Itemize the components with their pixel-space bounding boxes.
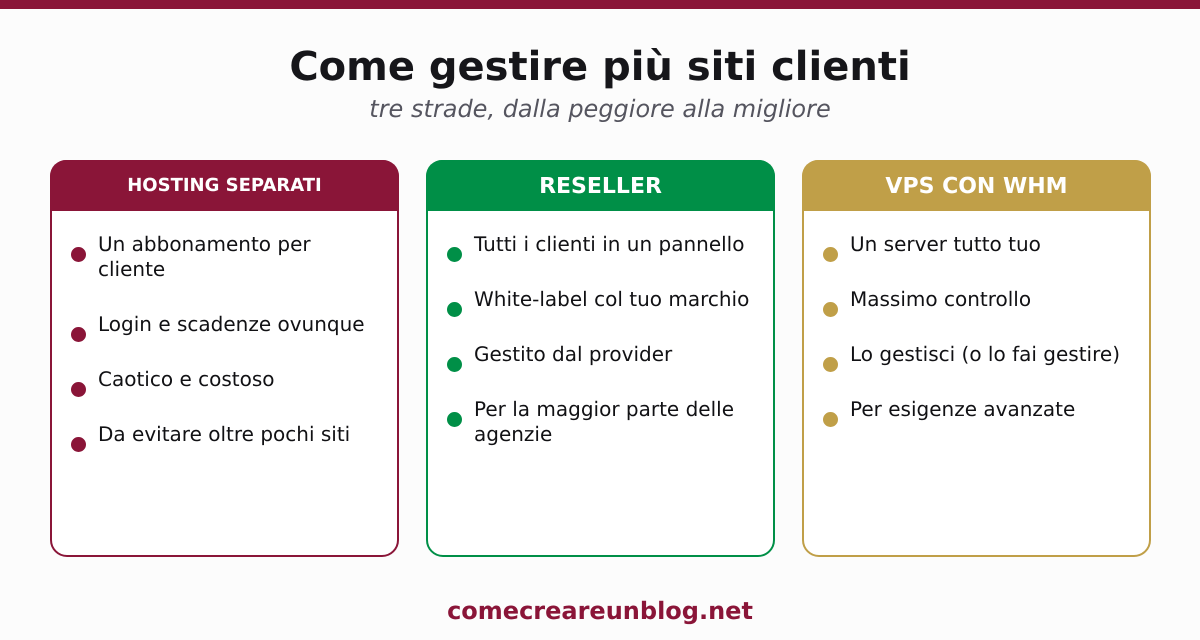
panel header: vps con whm bbox=[802, 160, 1151, 211]
panel header: hosting separati: HOSTING SEPARATI bbox=[127, 175, 322, 196]
panel: reseller bbox=[426, 160, 775, 556]
list item: esigenze: Per esigenze avanzate bbox=[850, 397, 1075, 421]
list item: abbonamento: cliente bbox=[98, 257, 165, 281]
list item: agenzie bbox=[447, 397, 734, 446]
panel: hosting separati bbox=[50, 160, 399, 556]
list item: controllo bbox=[823, 287, 1031, 317]
list item: agenzie: agenzie bbox=[474, 422, 552, 446]
list item: controllo: Massimo controllo bbox=[850, 287, 1031, 311]
list item: caotico: Caotico e costoso bbox=[98, 367, 274, 391]
list item: gestito: Gestito dal provider bbox=[474, 342, 673, 366]
list item: server: Un server tutto tuo bbox=[850, 232, 1041, 256]
panel header: reseller: RESELLER bbox=[539, 174, 662, 199]
panel header: hosting separati bbox=[50, 160, 399, 211]
list item: agenzie: Per la maggior parte delle bbox=[474, 397, 734, 421]
panel header: vps con whm: VPS CON WHM bbox=[885, 174, 1068, 199]
top accent bar bbox=[0, 0, 1200, 9]
subtitle: tre strade, dalla peggiore alla migliore bbox=[369, 95, 831, 123]
list item: white-label: White-label col tuo marchio bbox=[474, 287, 749, 311]
panel: vps con whm bbox=[802, 160, 1151, 556]
list item: gestisci: Lo gestisci (o lo fai gestire) bbox=[850, 342, 1120, 366]
title: Come gestire più siti clienti bbox=[289, 44, 911, 90]
list item: login: Login e scadenze ovunque bbox=[98, 312, 365, 336]
list item: da evitare: Da evitare oltre pochi siti bbox=[98, 422, 350, 446]
footer brand: comecreareunblog.net bbox=[447, 597, 753, 625]
panel header: reseller bbox=[426, 160, 775, 211]
list item: caotico bbox=[71, 367, 274, 397]
list item: pannello: Tutti i clienti in un pannello bbox=[473, 232, 744, 256]
list item: abbonamento: Un abbonamento per bbox=[98, 232, 311, 256]
list item: abbonamento bbox=[71, 232, 311, 281]
